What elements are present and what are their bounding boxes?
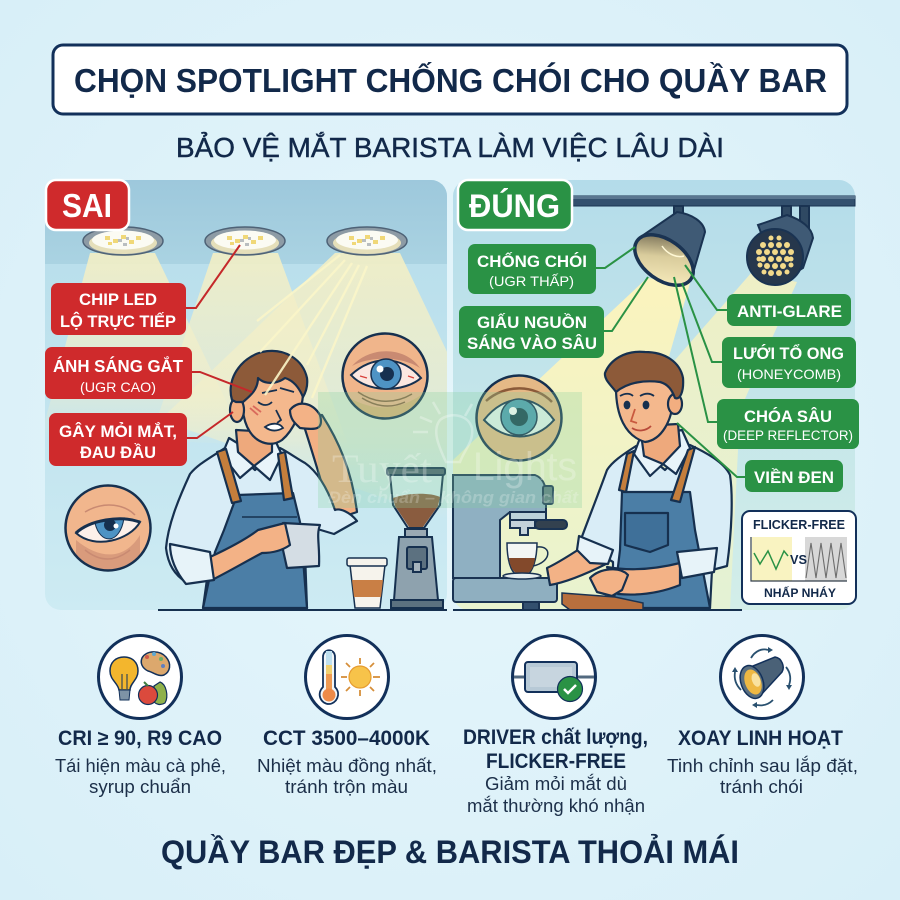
description: Tái hiện màu cà phê, [55,755,226,776]
description [667,755,858,797]
collar [222,438,282,480]
glare rays [257,255,367,398]
callout: harsh light [45,347,192,399]
description: syrup chuẩn [89,776,191,797]
footer tagline: QUẦY BAR ĐẸP & BARISTA THOẢI MÁI [161,834,739,870]
track rail [573,196,855,206]
icon: thermometer and sun [306,636,388,718]
left cuff [577,536,613,564]
eye: healthy [476,376,562,460]
callout: black rim: VIỀN ĐEN [754,468,834,487]
description: tránh chói [720,776,803,797]
description [467,773,645,816]
wooden tamping board [562,593,643,610]
callout: deep reflector: CHÓA SÂU [744,407,832,426]
pocket [625,513,668,552]
apron [203,493,307,608]
icon: bulb, palette and fruit [98,636,182,718]
left forearm and hand [210,523,290,580]
icon: rotating spotlight [720,636,804,718]
watermark: Lights [473,445,577,489]
right cuff [677,548,717,578]
callout: recessed source: SÁNG VÀO SÂU [467,334,597,353]
heading: XOAY LINH HOẠT [678,727,843,750]
panel: SAI (wrong) [40,180,470,610]
neck [236,430,272,466]
description: Tinh chỉnh sau lắp đặt, [667,755,858,776]
right panel background [453,180,855,610]
heading: CRI ≥ 90, R9 CAO [58,727,222,750]
badge: SAI: SAI [62,187,112,224]
right forearm [607,563,680,595]
callout: recessed source: GIẤU NGUỒN [477,313,587,332]
badge: ĐÚNG [458,180,572,230]
callout: harsh light: (UGR CAO) [80,379,156,395]
left panel background [40,180,470,610]
callout: deep reflector: (DEEP REFLECTOR) [723,428,853,443]
callout: anti-glare low UGR: CHỐNG CHÓI [477,251,587,271]
barista: relaxed [547,352,732,608]
hand at eye [290,404,321,429]
hair [605,352,683,398]
left rolled cuff [170,544,214,584]
apron straps [217,449,241,503]
eye: red, irritated [342,334,428,420]
counter line [158,609,447,611]
ear [230,398,244,422]
eye: half closed [66,486,150,570]
callout: anti-glare low UGR [468,244,596,294]
heading: FLICKER-FREE [486,750,626,773]
spotlight: honeycomb [747,206,813,285]
heading [463,726,648,773]
flicker comparison chart: NHẤP NHÁY [764,585,836,600]
description: Giảm mỏi mắt dù [485,773,627,794]
subtitle: BẢO VỆ MẮT BARISTA LÀM VIỆC LÂU DÀI [176,131,724,163]
badge: SAI [46,180,129,230]
callout: chip LED [51,283,186,335]
feature: CRI [55,636,226,797]
callout: eye strain [49,413,187,466]
feature: CCT [257,636,437,797]
flicker comparison chart [742,511,856,604]
callout: harsh light: ÁNH SÁNG GẮT [53,355,183,376]
raised forearm [302,415,357,520]
callout: honeycomb [722,337,856,388]
collar [634,430,690,476]
callout: recessed source [459,306,604,358]
title [53,45,847,114]
description: mắt thường khó nhận [467,795,645,816]
counter line [453,609,742,611]
straps [619,451,634,492]
head [616,370,673,442]
pitcher [283,523,320,568]
callout: black rim [745,460,843,492]
callout: anti-glare: ANTI-GLARE [737,302,842,321]
callout connector lines (green) [596,247,745,477]
callout: eye strain: ĐAU ĐẦU [80,443,156,462]
espresso cup [503,543,548,579]
left forearm [547,542,606,585]
ear [668,394,682,414]
badge: ĐÚNG: ĐÚNG [469,188,560,224]
flicker comparison chart: FLICKER-FREE [753,518,845,532]
callout: chip LED: CHIP LED [79,290,157,309]
tired face details [250,388,294,431]
shirt [580,445,732,608]
feature: driver [463,636,648,816]
panel: ĐÚNG (correct) [453,180,859,610]
heading: DRIVER chất lượng, [463,726,648,749]
callout: honeycomb: (HONEYCOMB) [737,366,841,382]
title: CHỌN SPOTLIGHT CHỐNG CHÓI CHO QUẦY BAR [74,61,827,99]
hair [231,351,307,402]
neck [640,424,680,464]
callout: deep reflector [717,399,859,449]
icon: LED driver with check [512,636,596,718]
callout: anti-glare [727,294,851,326]
face details [620,394,654,430]
description: tránh trộn màu [285,776,408,797]
callout: honeycomb: LƯỚI TỔ ONG [733,344,844,363]
barista: tired, rubbing eye [166,351,357,608]
watermark: Tuyết [332,446,432,491]
callout connector lines (red) [186,245,252,438]
spotlight: anti-glare [626,206,705,296]
head [243,368,303,444]
shirt [166,446,357,608]
espresso machine [453,475,567,610]
feature: rotation [667,636,858,797]
flicker comparison chart: VS [790,553,807,567]
description: Nhiệt màu đồng nhất, [257,755,437,776]
heading: CCT 3500–4000K [263,727,430,750]
coffee grinder [387,468,445,608]
apron [613,492,710,608]
callout: chip LED: LỘ TRỰC TIẾP [60,312,176,331]
hand [590,569,628,596]
watermark [318,392,582,508]
callout: anti-glare low UGR: (UGR THẤP) [489,273,574,289]
takeaway cup [347,558,387,608]
watermark: Đèn chuẩn – không gian chất [328,488,579,507]
description [257,755,437,797]
description [55,755,226,797]
callout: eye strain: GÂY MỎI MẮT, [59,422,177,441]
recessed downlights with exposed chips [83,227,407,255]
